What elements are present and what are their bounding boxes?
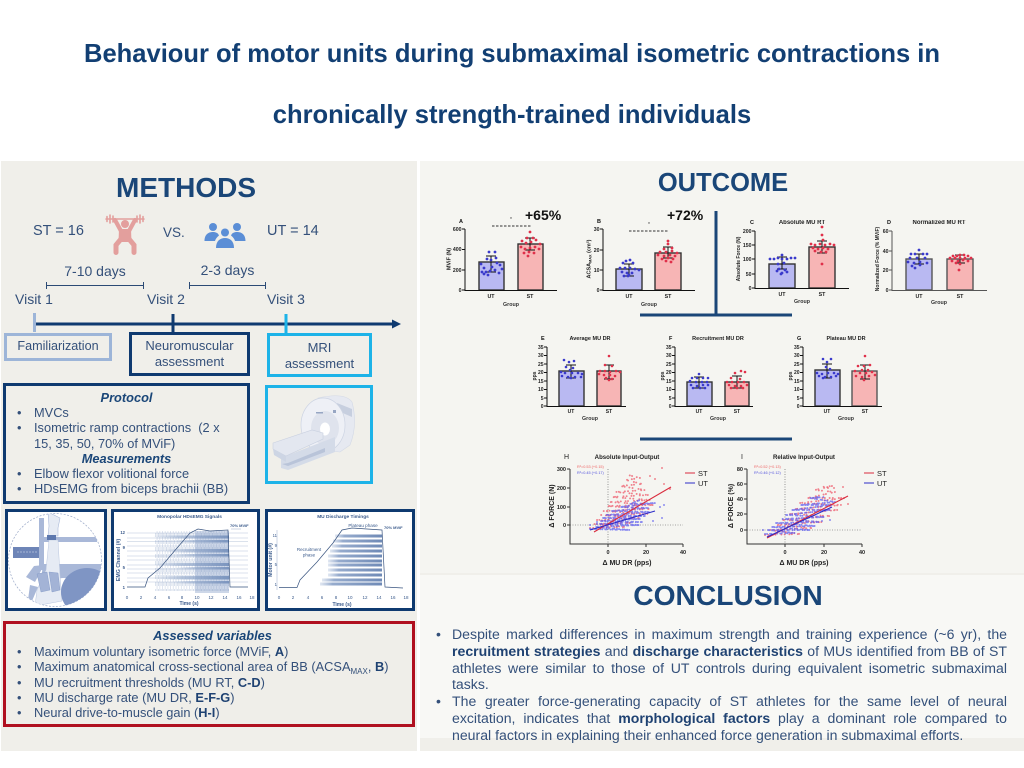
chart F: recruitment MU DR: pps bbox=[660, 371, 666, 380]
chart D: normalized MU RT: D bbox=[887, 220, 891, 226]
chart: EMG signals: 14 bbox=[222, 595, 228, 600]
chart H: absolute input-output: 0 bbox=[563, 523, 566, 529]
chart G: plateau MU DR: ST bbox=[862, 409, 868, 415]
chart B: ACSAmax bbox=[586, 219, 695, 308]
list: protocol items: • bbox=[17, 405, 21, 420]
chart G: plateau MU DR: UT bbox=[824, 409, 830, 415]
chart F: recruitment MU DR: UT bbox=[696, 409, 702, 415]
chart I: relative input-output: 20 bbox=[737, 512, 743, 518]
chart: EMG signals bbox=[116, 514, 255, 607]
interval: 7-10 days: 7-10 days bbox=[64, 263, 126, 279]
chart E: average MU DR: 20 bbox=[538, 370, 544, 376]
chart: discharge timings: 16 bbox=[390, 595, 396, 600]
list: protocol items: • bbox=[17, 420, 21, 435]
chart E: average MU DR: Average MU DR bbox=[569, 336, 611, 342]
chart E: average MU DR: ST bbox=[606, 409, 612, 415]
chart A: MViF: UT bbox=[487, 294, 495, 300]
box: familiarization: Familiarization bbox=[17, 339, 99, 353]
chart H: absolute input-output bbox=[549, 454, 686, 567]
chart: EMG signals: 18 bbox=[249, 595, 255, 600]
chart: discharge timings: 14 bbox=[376, 595, 382, 600]
chart I: relative input-output: 0 bbox=[783, 550, 787, 556]
chart H: absolute input-output: R²=0.53 (+0.15) bbox=[577, 465, 605, 469]
chart: discharge timings bbox=[268, 514, 409, 608]
chart B: ACSAmax: UT bbox=[625, 294, 633, 300]
legend H: UT bbox=[698, 479, 708, 488]
chart E: average MU DR: 15 bbox=[538, 379, 544, 385]
interval: 2-3 days bbox=[189, 262, 266, 289]
chart: EMG signals: 12 bbox=[120, 530, 126, 535]
text: conclusion bullets: Despite marked differences in maximum strength and training experience (~6 yr), the bbox=[452, 626, 1007, 642]
chart C: absolute MU RT: ST bbox=[819, 292, 826, 298]
heading: measurements: Measurements bbox=[82, 451, 171, 466]
list: measurement items: • bbox=[17, 466, 21, 481]
chart: EMG signals: 6 bbox=[168, 595, 171, 600]
chart F: recruitment MU DR: 35 bbox=[666, 345, 672, 351]
icon: group of people bbox=[204, 223, 246, 248]
text: conclusion bullets: The greater force-generating capacity of ST athletes for the same level of neural bbox=[452, 693, 1007, 709]
chart: discharge timings: 9 bbox=[275, 543, 278, 548]
chart E: average MU DR: 0 bbox=[541, 404, 544, 410]
chart I: relative input-output: Relative Input-Output bbox=[773, 454, 835, 461]
text: visit 1: Visit 1 bbox=[15, 291, 53, 307]
chart B: ACSAmax: 20 bbox=[594, 248, 600, 254]
chart I: relative input-output: 60 bbox=[737, 482, 743, 488]
chart E: average MU DR: 35 bbox=[538, 345, 544, 351]
chart: discharge timings: 1 bbox=[275, 582, 278, 587]
chart A: MViF: ST bbox=[527, 294, 534, 300]
chart F: recruitment MU DR: 5 bbox=[669, 396, 672, 402]
legend I bbox=[864, 469, 887, 488]
chart I: relative input-output bbox=[728, 454, 865, 567]
heading: protocol: Protocol bbox=[101, 390, 152, 405]
chart C: absolute MU RT: 200 bbox=[743, 229, 752, 235]
box: neuromuscular assessment: assessment bbox=[155, 354, 224, 369]
divider lines bbox=[640, 211, 792, 440]
box: familiarization bbox=[4, 333, 112, 361]
chart H: absolute input-output: 100 bbox=[557, 505, 566, 511]
list: assessed variables: • bbox=[17, 675, 21, 690]
chart B: ACSAmax: MAX bbox=[588, 254, 592, 263]
box: MRI assessment bbox=[267, 333, 372, 377]
box: protocol and measurements: 15, 35, 50, 70% of MViF) bbox=[34, 436, 175, 451]
chart D: normalized MU RT: 40 bbox=[883, 249, 889, 255]
chart G: plateau MU DR: 15 bbox=[794, 379, 800, 385]
chart G: plateau MU DR: 25 bbox=[794, 362, 800, 368]
chart C: absolute MU RT: Group bbox=[794, 299, 811, 305]
chart C: absolute MU RT: 50 bbox=[746, 272, 752, 278]
text: visit 3: Visit 3 bbox=[267, 291, 305, 307]
chart C: absolute MU RT: Absolute MU RT bbox=[779, 220, 825, 226]
chart C: absolute MU RT: Absolute Force (N) bbox=[736, 236, 742, 281]
list: assessed variables: • bbox=[17, 690, 21, 705]
chart G: plateau MU DR: G bbox=[797, 336, 801, 342]
box: protocol and measurements bbox=[3, 383, 250, 504]
text: versus: VS. bbox=[163, 225, 185, 240]
chart C: absolute MU RT: 0 bbox=[749, 286, 752, 292]
text: conclusion bullets: tasks. bbox=[452, 676, 489, 692]
text: conclusion bullets: recruitment strategies and discharge characteristics of MUs identified from BB of ST bbox=[452, 643, 1007, 659]
box: MRI assessment: MRI bbox=[308, 340, 331, 355]
chart D: normalized MU RT: 60 bbox=[883, 229, 889, 235]
heading: methods: METHODS bbox=[116, 172, 256, 203]
chart H: absolute input-output: 200 bbox=[557, 486, 566, 492]
text: conclusion bullets: athletes were similar to those of UT controls during equivalent isometric submaximal bbox=[452, 660, 1007, 676]
chart: EMG signals: Time (s) bbox=[179, 601, 199, 607]
panel: conclusion bbox=[420, 573, 1024, 751]
interval: 2-3 days: 2-3 days bbox=[201, 262, 254, 278]
chart: EMG signals: 5 bbox=[123, 565, 126, 570]
chart B: ACSAmax: * bbox=[648, 222, 650, 228]
chart G: plateau MU DR: Plateau MU DR bbox=[826, 336, 866, 342]
chart G: plateau MU DR: 30 bbox=[794, 353, 800, 359]
chart: EMG signals: 16 bbox=[236, 595, 242, 600]
chart: discharge timings: phase bbox=[303, 552, 316, 558]
box: assessed variables: Maximum voluntary isometric force (MViF, A) bbox=[34, 644, 288, 659]
chart G: plateau MU DR: 0 bbox=[797, 404, 800, 410]
box: protocol and measurements: MVCs bbox=[34, 405, 69, 420]
chart F: recruitment MU DR: 0 bbox=[669, 404, 672, 410]
chart D: normalized MU RT: Normalized Force (% MViF) bbox=[875, 226, 881, 291]
chart E: average MU DR: E bbox=[541, 336, 545, 342]
icon: arm in dynamometer bbox=[8, 513, 102, 607]
chart E: average MU DR: 5 bbox=[541, 396, 544, 402]
chart I: relative input-output: R²=0.52 (+0.13) bbox=[754, 465, 782, 469]
chart F: recruitment MU DR: 15 bbox=[666, 379, 672, 385]
text: conclusion bullets: excitation, indicates that morphological factors play a dominant role compared to bbox=[452, 710, 1007, 726]
chart D: normalized MU RT: ST bbox=[957, 294, 964, 300]
chart G: plateau MU DR: pps bbox=[788, 371, 794, 380]
chart I: relative input-output: Δ FORCE (%) bbox=[728, 484, 735, 528]
chart I: relative input-output: 20 bbox=[821, 550, 827, 556]
chart F: recruitment MU DR: 25 bbox=[666, 362, 672, 368]
list: assessed variables: • bbox=[17, 705, 21, 720]
chart: discharge timings: 11 bbox=[273, 533, 278, 538]
chart: discharge timings: 2 bbox=[292, 595, 295, 600]
chart E: average MU DR: Group bbox=[582, 416, 599, 422]
chart I: relative input-output: 80 bbox=[737, 467, 743, 473]
text: • bbox=[436, 693, 441, 709]
chart H: absolute input-output: R²=0.45 (+0.17) bbox=[577, 471, 605, 475]
chart I: relative input-output: I bbox=[741, 454, 743, 461]
panel: MU discharge timings bbox=[265, 509, 415, 611]
chart A: MViF: MViF (N) bbox=[446, 248, 452, 270]
chart G: plateau MU DR: 5 bbox=[797, 396, 800, 402]
chart: EMG signals: 4 bbox=[154, 595, 157, 600]
chart D: normalized MU RT: 20 bbox=[883, 268, 889, 274]
chart G: plateau MU DR: 10 bbox=[794, 387, 800, 393]
legend I: ST bbox=[877, 469, 887, 478]
box: assessed variables: Maximum anatomical cross-sectional area of BB (ACSAMAX, B) bbox=[34, 659, 388, 676]
chart H: absolute input-output: 300 bbox=[557, 467, 566, 473]
chart D: normalized MU RT: Group bbox=[931, 300, 948, 306]
chart I: relative input-output: 40 bbox=[859, 550, 865, 556]
chart: discharge timings: 6 bbox=[321, 595, 324, 600]
list: assessed variables: • bbox=[17, 659, 21, 674]
chart D: normalized MU RT: 0 bbox=[886, 288, 889, 294]
chart B: ACSAmax: B bbox=[597, 219, 601, 225]
chart I: relative input-output: R²=0.46 (+0.12) bbox=[754, 471, 782, 475]
chart: discharge timings: Plateau phase bbox=[348, 523, 378, 528]
chart G: plateau MU DR: Group bbox=[838, 416, 855, 422]
chart: discharge timings: 70% MViF bbox=[384, 525, 403, 530]
title bbox=[84, 40, 940, 129]
chart: EMG signals: EMG Channel (#) bbox=[116, 539, 122, 581]
chart B: ACSAmax: 30 bbox=[594, 227, 600, 233]
chart H: absolute input-output: H bbox=[564, 454, 569, 461]
box: neuromuscular assessment bbox=[129, 332, 250, 376]
chart E: average MU DR: pps bbox=[532, 371, 538, 380]
chart B: ACSAmax: Group bbox=[641, 302, 658, 308]
chart F: recruitment MU DR: Recruitment MU DR bbox=[692, 336, 744, 342]
chart: EMG signals: 0 bbox=[126, 595, 129, 600]
chart A: MViF: 400 bbox=[453, 247, 462, 253]
chart: EMG signals: 12 bbox=[208, 595, 214, 600]
chart: discharge timings: 12 bbox=[362, 595, 368, 600]
chart I: relative input-output: 40 bbox=[737, 497, 743, 503]
callout: +72%: +72% bbox=[667, 207, 703, 223]
chart: EMG signals: 9 bbox=[123, 545, 126, 550]
chart: EMG signals: 1 bbox=[123, 585, 126, 590]
title: chronically strength-trained individuals bbox=[273, 101, 751, 129]
chart: EMG signals: Monopolar HDsEMG Signals bbox=[157, 514, 222, 520]
chart: discharge timings: 8 bbox=[335, 595, 338, 600]
text: conclusion bullets bbox=[436, 626, 1007, 743]
panel: MRI scanner illustration bbox=[265, 385, 373, 484]
chart A: MViF: Group bbox=[503, 302, 520, 308]
chart: discharge timings: MU Discharge Timings bbox=[317, 514, 369, 520]
chart E: average MU DR: 30 bbox=[538, 353, 544, 359]
legend I: UT bbox=[877, 479, 887, 488]
chart F: recruitment MU DR: 10 bbox=[666, 387, 672, 393]
chart F: recruitment MU DR bbox=[660, 336, 753, 422]
chart B: ACSAmax: (cm²) bbox=[586, 239, 592, 254]
chart C: absolute MU RT: UT bbox=[778, 292, 786, 298]
text: visit 2: Visit 2 bbox=[147, 291, 185, 307]
chart C: absolute MU RT: 150 bbox=[743, 243, 752, 249]
text: • bbox=[436, 626, 441, 642]
chart I: relative input-output: Δ MU DR (pps) bbox=[780, 560, 828, 567]
panel: methods bbox=[1, 161, 417, 751]
chart: EMG signals: 70% MViF bbox=[230, 523, 249, 528]
chart: discharge timings: Recruitment bbox=[297, 547, 322, 552]
interval: 7-10 days bbox=[46, 263, 144, 289]
chart A: MViF: A bbox=[459, 219, 463, 225]
chart A: MViF bbox=[446, 217, 557, 308]
box: assessed variables bbox=[3, 621, 415, 727]
chart: EMG signals: 10 bbox=[194, 595, 200, 600]
chart D: normalized MU RT: Normalized MU RT bbox=[912, 220, 966, 226]
callout: +65%: +65% bbox=[525, 207, 561, 223]
chart: discharge timings: Time (s) bbox=[332, 602, 352, 608]
panel: outcome bbox=[420, 161, 1024, 573]
chart H: absolute input-output: 40 bbox=[680, 550, 686, 556]
chart: discharge timings: 0 bbox=[278, 595, 281, 600]
box: protocol and measurements: Elbow flexor volitional force bbox=[34, 466, 189, 481]
chart A: MViF: 200 bbox=[453, 268, 462, 274]
chart H: absolute input-output: 20 bbox=[643, 550, 649, 556]
chart G: plateau MU DR: 35 bbox=[794, 345, 800, 351]
chart: discharge timings: 5 bbox=[275, 562, 278, 567]
chart H: absolute input-output: Δ FORCE (N) bbox=[549, 484, 556, 528]
chart F: recruitment MU DR: ST bbox=[734, 409, 740, 415]
chart: discharge timings: 18 bbox=[403, 595, 409, 600]
list: measurement items: • bbox=[17, 481, 21, 496]
chart F: recruitment MU DR: F bbox=[669, 336, 673, 342]
legend H bbox=[685, 469, 708, 488]
chart B: ACSAmax: ST bbox=[665, 294, 672, 300]
list: assessed variables: • bbox=[17, 644, 21, 659]
chart A: MViF: 600 bbox=[453, 227, 462, 233]
list: assessed variables bbox=[17, 644, 388, 720]
chart B: ACSAmax: 10 bbox=[594, 268, 600, 274]
chart: EMG signals: 2 bbox=[140, 595, 143, 600]
chart H: absolute input-output: 0 bbox=[606, 550, 610, 556]
chart B: ACSAmax: ACSA bbox=[586, 263, 592, 279]
chart E: average MU DR: 25 bbox=[538, 362, 544, 368]
chart D: normalized MU RT bbox=[875, 220, 987, 306]
panel: monopolar HDsEMG signals bbox=[111, 509, 260, 611]
icon: MRI scanner bbox=[272, 396, 355, 470]
chart: discharge timings: Motor unit (#) bbox=[268, 543, 274, 577]
chart H: absolute input-output: Absolute Input-Output bbox=[595, 454, 659, 461]
list: protocol items bbox=[17, 405, 220, 451]
chart E: average MU DR: UT bbox=[568, 409, 574, 415]
box: neuromuscular assessment: Neuromuscular bbox=[145, 338, 234, 353]
chart G: plateau MU DR bbox=[788, 336, 882, 422]
box: protocol and measurements: HDsEMG from biceps brachii (BB) bbox=[34, 481, 228, 496]
box: assessed variables: MU discharge rate (MU DR, E-F-G) bbox=[34, 690, 235, 705]
text: ST group size: ST = 16 bbox=[33, 223, 84, 239]
heading: conclusion: CONCLUSION bbox=[633, 579, 823, 611]
chart I: relative input-output: 0 bbox=[740, 528, 743, 534]
box: assessed variables: MU recruitment thresholds (MU RT, C-D) bbox=[34, 675, 265, 690]
box: assessed variables: Neural drive-to-muscle gain (H-I) bbox=[34, 705, 220, 720]
heading: assessed variables: Assessed variables bbox=[153, 628, 272, 643]
box: protocol and measurements: Isometric ramp contractions (2 x bbox=[34, 420, 220, 435]
chart C: absolute MU RT: C bbox=[750, 220, 754, 226]
chart F: recruitment MU DR: 20 bbox=[666, 370, 672, 376]
title: Behaviour of motor units during submaximal isometric contractions in bbox=[84, 40, 940, 68]
heading: outcome: OUTCOME bbox=[658, 169, 788, 197]
chart C: absolute MU RT bbox=[736, 220, 849, 305]
chart E: average MU DR bbox=[532, 336, 626, 422]
panel: arm setup illustration bbox=[5, 509, 107, 611]
chart G: plateau MU DR: 20 bbox=[794, 370, 800, 376]
legend H: ST bbox=[698, 469, 708, 478]
chart E: average MU DR: 10 bbox=[538, 387, 544, 393]
chart D: normalized MU RT: UT bbox=[915, 294, 923, 300]
timeline arrow bbox=[33, 313, 401, 333]
list: measurement items bbox=[17, 466, 228, 496]
chart F: recruitment MU DR: Group bbox=[710, 416, 727, 422]
box: MRI assessment: assessment bbox=[285, 356, 354, 371]
chart: discharge timings: 10 bbox=[347, 595, 353, 600]
icon: weightlifter bbox=[105, 214, 145, 255]
chart: EMG signals: 8 bbox=[181, 595, 184, 600]
chart: discharge timings: 4 bbox=[307, 595, 310, 600]
chart F: recruitment MU DR: 30 bbox=[666, 353, 672, 359]
chart C: absolute MU RT: 100 bbox=[743, 257, 752, 263]
text: conclusion bullets: neural factors in explaining their enhanced force generation in submaximal efforts. bbox=[452, 727, 963, 743]
chart A: MViF: 0 bbox=[459, 288, 462, 294]
text: UT group size: UT = 14 bbox=[267, 223, 319, 239]
chart A: MViF: * bbox=[510, 217, 512, 223]
chart H: absolute input-output: Δ MU DR (pps) bbox=[603, 560, 651, 567]
chart B: ACSAmax: 0 bbox=[597, 288, 600, 294]
